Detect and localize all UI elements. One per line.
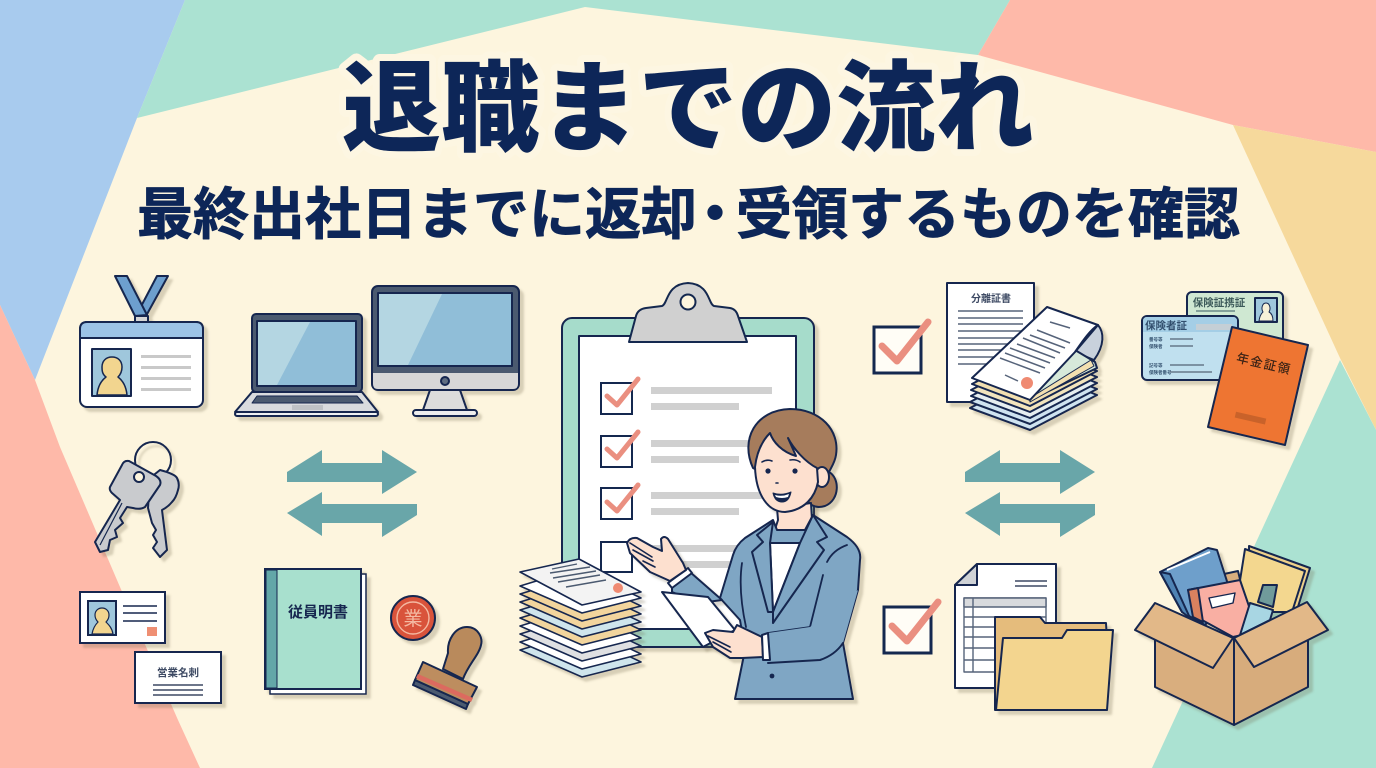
business card (135, 652, 221, 703)
certificate heading: 分離証書 (971, 292, 1011, 305)
face (755, 433, 818, 512)
neck (770, 503, 812, 545)
holding hand (705, 625, 763, 658)
icon: table document and folder (955, 564, 1113, 710)
blue insurance card: 保険者証 (1145, 319, 1187, 332)
checklist lines (651, 387, 772, 568)
sleeve cuff (668, 568, 692, 588)
bottle (1240, 585, 1277, 635)
blue insurance card: 保険者 (1149, 343, 1163, 350)
ear (815, 467, 829, 487)
icon: keys on ring (95, 442, 179, 557)
icon: insurance and pension cards (1142, 292, 1308, 445)
orange pension book (1208, 327, 1308, 445)
pointing sleeve (672, 572, 722, 603)
check marks (607, 379, 638, 511)
folder (995, 617, 1113, 710)
eyes, brows, nose, mouth (762, 460, 800, 502)
paper stack, centre (520, 559, 641, 677)
yellow binder (1235, 546, 1310, 612)
document pile (970, 307, 1102, 430)
box flaps (1135, 603, 1233, 668)
title: 退職までの流れ (342, 53, 1034, 164)
clipboard checklist (562, 283, 814, 647)
hair back and bun (748, 409, 837, 507)
icon: laptop (235, 314, 378, 416)
icon: employee handbook (265, 569, 366, 694)
icon: employee card and business card (80, 592, 221, 703)
green insurance card (1187, 292, 1283, 358)
clip (629, 283, 747, 342)
icon: cardboard box with belongings (1135, 546, 1328, 725)
icon: certificate documents (947, 283, 1102, 430)
holding cuff (762, 633, 770, 660)
blue insurance card: 番号等 (1149, 336, 1163, 343)
blue book (1160, 548, 1232, 625)
certificate lines (958, 311, 1023, 364)
jacket button (770, 674, 774, 678)
blue insurance card: 保険者番号 (1149, 369, 1172, 376)
lapels (752, 515, 827, 623)
employee card (80, 592, 165, 643)
icon: round seal: 業 (403, 608, 423, 630)
jacket torso (720, 515, 860, 699)
checkboxes (601, 383, 632, 572)
arrows: exchange, right (965, 450, 1095, 537)
shirt (770, 543, 800, 612)
clipboard board (562, 318, 814, 647)
table document (955, 564, 1056, 688)
clip hole (680, 294, 696, 310)
jacket creases (741, 545, 847, 633)
certificate sheet (947, 283, 1034, 402)
pink notebook (1188, 580, 1252, 637)
blue insurance card: 記号等 (1149, 362, 1163, 369)
person presenting (627, 409, 860, 699)
brown item behind (1224, 571, 1245, 605)
icon: ID badge with lanyard (80, 276, 203, 407)
green insurance card: 保険証携証 (1193, 296, 1246, 309)
subtitle: 最終出社日までに返却・受領するものを確認 (137, 183, 1240, 246)
icon: round seal (391, 596, 435, 640)
icon: desktop monitor (372, 286, 519, 416)
box body (1155, 635, 1234, 725)
business card: 営業名刺 (157, 666, 199, 679)
arrows: exchange, left (287, 450, 417, 537)
holding sleeve (768, 590, 858, 663)
check mark box, upper right (874, 322, 928, 373)
icon: wooden stamp (413, 627, 481, 709)
pointing hand (627, 537, 686, 581)
check mark box, lower right (884, 602, 938, 653)
orange pension book: 年金証領 (1235, 350, 1293, 377)
icon: employee handbook: 従員明書 (288, 603, 348, 621)
sheet in hand (662, 592, 735, 647)
blue insurance card (1142, 316, 1238, 380)
